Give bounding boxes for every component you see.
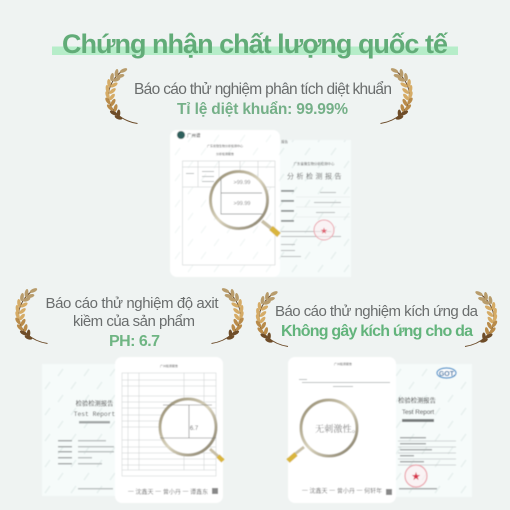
title: Chứng nhận chất lượng quốc tế [62, 29, 449, 59]
back page: 分析检测报告 [287, 172, 344, 180]
icon: right laurel skin [465, 290, 498, 346]
text: antibacterial rate: Tỉ lệ diệt khuẩn: 99.99% [177, 101, 348, 118]
back page [390, 364, 472, 497]
back page: Test Report [402, 409, 434, 416]
icon: lab logo [177, 131, 185, 139]
signatures: 一 沈鑫天 一 曾小丹 一 谭鑫东 [128, 488, 208, 496]
icon: magnifier [210, 172, 279, 235]
front page: 分析检测报告 [216, 151, 234, 156]
back page [42, 364, 127, 496]
icon: right laurel top [380, 67, 414, 124]
back page: 检验检测报告 [398, 396, 436, 404]
front page [170, 130, 280, 277]
front page [288, 357, 396, 503]
front page [115, 357, 223, 503]
front page: 广东省微生物分析检测中心 [207, 143, 243, 148]
text: no irritation: 无刺激性。 [315, 421, 361, 435]
section heading: pH test: kiềm của sản phẩm [73, 313, 195, 330]
icon: magnifier: >99.99 [234, 180, 250, 186]
icon: magnifier [160, 399, 223, 461]
icon: right laurel pH [212, 287, 245, 344]
panel: pH certificate [42, 357, 223, 503]
back page: ★ [320, 227, 328, 235]
text: magnified value: 6.7 [190, 426, 199, 432]
front page: 广州检测报告 [334, 361, 352, 366]
text: pH value: PH: 6.7 [109, 333, 160, 350]
back page: ★ [411, 472, 421, 482]
icon: left laurel skin [255, 290, 288, 346]
section heading: skin irritation test [255, 290, 498, 346]
text: skin report name: Báo cáo thử nghiệm kích ứng da [275, 303, 479, 320]
text: magnified value: >99.99 [234, 201, 250, 207]
text: pH report name: Báo cáo thử nghiệm độ axit [46, 295, 219, 312]
front page: 一 沈鑫天 一 曾小丹 一 何轩年 [302, 487, 382, 495]
front page: 广州谱 [187, 132, 201, 139]
text: skin result: Không gây kích ứng cho da [281, 323, 473, 340]
back page: 检验检测报告 [76, 398, 113, 408]
icon: magnifier [288, 400, 361, 461]
back page: 报告 [281, 139, 288, 144]
panel: antibacterial certificate [170, 130, 351, 277]
text: antibacterial report name: Báo cáo thử nghiệm phân tích diệt khuẩn [134, 81, 392, 98]
icon: left laurel pH [14, 287, 48, 344]
back page [270, 139, 351, 277]
front page: 广州检测报告 [160, 363, 178, 368]
section heading: antibacterial test [104, 67, 414, 124]
icon: left laurel top [104, 67, 138, 124]
section heading: pH test [14, 287, 245, 350]
back page: 广东省微生物分析检测中心 [294, 161, 335, 166]
icon: GOT logo: GOT. [439, 371, 455, 378]
back page: Test Report [74, 411, 115, 418]
panel: skin irritation certificate [288, 357, 472, 503]
